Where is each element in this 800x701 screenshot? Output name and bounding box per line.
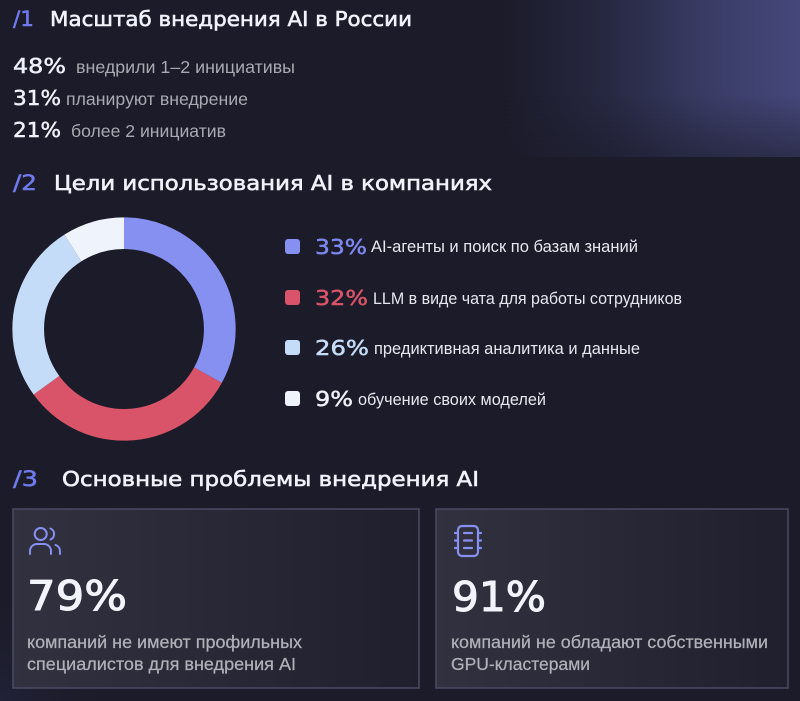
value: 91%: 91% xyxy=(452,573,546,621)
legend xyxy=(285,235,682,411)
legend item: 32%: 32% xyxy=(315,286,368,310)
heading 1: /1 xyxy=(13,7,34,31)
legend item: 9% xyxy=(285,387,546,411)
section 2: goals of AI use xyxy=(13,171,682,425)
icon: chip xyxy=(455,526,481,556)
stat: 21%: 21% xyxy=(13,118,61,142)
legend item: 26% xyxy=(285,336,640,360)
legend item: 26%: предиктивная аналитика и данные xyxy=(374,340,640,358)
section 3: main problems xyxy=(13,467,788,688)
heading 2: /2 xyxy=(13,171,37,195)
section 1: scale of AI adoption xyxy=(13,7,412,142)
heading 1: Масштаб внедрения AI в России xyxy=(50,7,412,31)
heading 2: Цели использования AI в компаниях xyxy=(54,171,492,195)
card: specialists xyxy=(13,509,419,688)
legend item: 9%: обучение своих моделей xyxy=(358,391,546,409)
icon: users xyxy=(30,528,60,554)
description: специалистов для внедрения AI xyxy=(27,654,296,674)
stat: 48% xyxy=(13,54,295,78)
heading 3: Основные проблемы внедрения AI xyxy=(62,467,479,491)
heading 3: /3 xyxy=(13,467,38,491)
donut chart xyxy=(28,233,220,425)
stat: 31%: планируют внедрение xyxy=(66,89,248,109)
value: 79%: 79% xyxy=(27,572,127,620)
legend item: 32%: LLM в виде чата для работы сотрудников xyxy=(373,290,682,308)
legend item: 33%: AI-агенты и поиск по базам знаний xyxy=(371,238,638,256)
legend item: 32% xyxy=(285,286,682,310)
stat: 21%: более 2 инициатив xyxy=(71,121,226,141)
description xyxy=(451,632,768,674)
description: компаний не имеют профильных xyxy=(27,632,302,652)
stat: 31% xyxy=(13,86,248,110)
description: GPU-кластерами xyxy=(451,654,590,674)
stat: 31%: 31% xyxy=(13,86,61,110)
legend item: 9%: 9% xyxy=(315,387,353,411)
description xyxy=(27,632,302,674)
card: GPU clusters xyxy=(436,509,788,688)
legend item: 33%: 33% xyxy=(315,235,367,259)
legend item: 26%: 26% xyxy=(315,336,369,360)
stat: 21% xyxy=(13,118,226,142)
legend item: 33% xyxy=(285,235,638,259)
stat: 48%: 48% xyxy=(13,54,66,78)
description: компаний не обладают собственными xyxy=(451,632,768,652)
stat: 48%: внедрили 1–2 инициативы xyxy=(76,57,295,77)
